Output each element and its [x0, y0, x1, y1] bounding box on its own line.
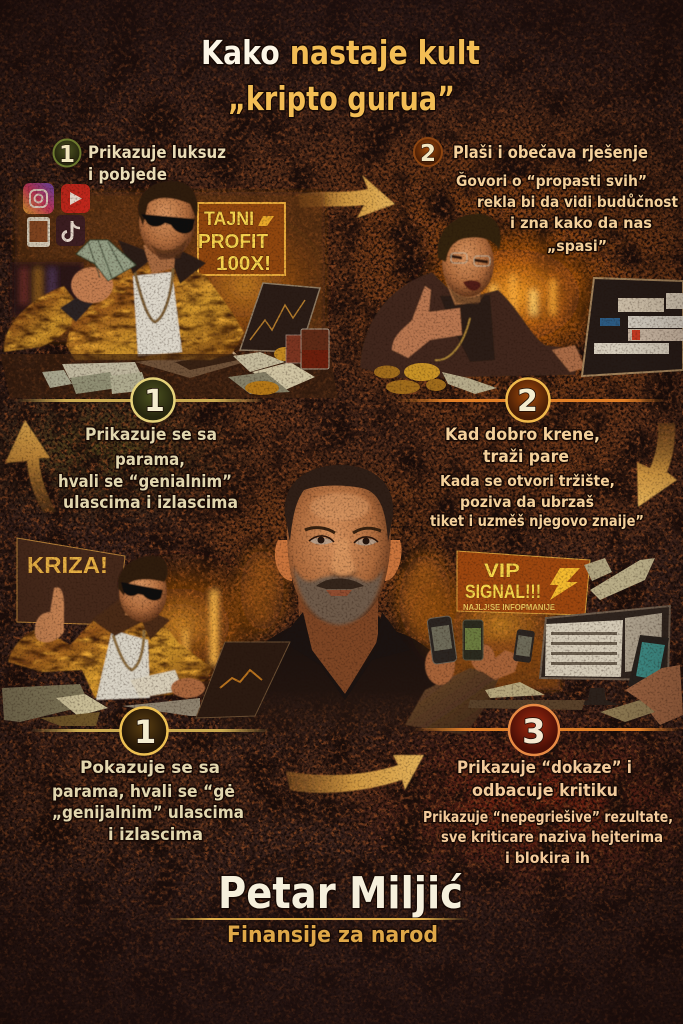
badge: small 1: [54, 140, 80, 168]
arrow: top, panel 1 to panel 2: [298, 175, 395, 218]
badge: small 1: 1: [59, 142, 75, 168]
text: step 2 intro: „spasi”: [547, 237, 607, 255]
man with thumb up: [8, 556, 212, 700]
icon: tiktok: [56, 215, 85, 246]
text: lower left description: [52, 758, 244, 845]
sign: Tajni profit 100x: PROFIT: [198, 231, 268, 253]
text: when it goes well: traži pare: [483, 447, 569, 467]
heading: shows luxury: [88, 143, 226, 185]
panel: step 1 luxury scene: [0, 181, 338, 398]
text: lower left description: Pokazuje se sa: [80, 758, 220, 778]
money stacks: [2, 684, 108, 726]
author name: Petar Miljić: [218, 868, 463, 919]
sign: Tajni profit 100x: [198, 203, 285, 275]
neck: [298, 595, 378, 694]
badge: big 3 red: 3: [522, 712, 546, 752]
panel: step 3 proof scene: [405, 551, 683, 735]
moustache: [316, 578, 364, 589]
phones: [427, 616, 535, 664]
laptop with rust chart: [122, 642, 290, 718]
sign: Kriza: [17, 538, 125, 625]
sign: VIP signal: [457, 551, 655, 615]
glow behind head: [240, 550, 451, 645]
heading: shows proof: odbacuje kritiku: [472, 781, 618, 801]
shirt: [216, 610, 455, 745]
text: when it goes well: tiket i uzměš njegovo znaije”: [430, 512, 644, 530]
collar: [280, 612, 410, 700]
skyline glow: [80, 550, 280, 700]
tagline: Finansije za narod: [227, 923, 438, 948]
icon: phone: [27, 217, 50, 247]
text: step 2 intro: [456, 171, 678, 255]
orange chart glow: [410, 220, 620, 370]
text: step 1 description: parama,: [115, 450, 185, 470]
portrait: Petar Miljić: [216, 465, 455, 745]
badge: small 2: [414, 138, 442, 167]
text: step 1 description: ulascima i izlascima: [63, 493, 238, 513]
heading: shows proof: Prikazuje “dokaze” i: [457, 758, 632, 778]
text: when it goes well: poziva da ubrzaš: [460, 493, 594, 511]
ears: [275, 540, 292, 581]
man in gold jacket with cash: [4, 181, 244, 360]
badge: big 2 orange: [506, 378, 550, 422]
text: step 2 intro: i zna kako da nas: [510, 214, 652, 232]
cash fan: [76, 240, 136, 281]
text: step 3 description: i blokira ih: [505, 849, 590, 867]
title: „kripto gurua”: [228, 79, 455, 118]
heading: scares and promises: Plaši i obečava rješenje: [453, 143, 648, 163]
badge: big 2 orange: 2: [517, 384, 538, 419]
forehead highlight: [310, 493, 370, 521]
face: [287, 482, 391, 623]
desk: [468, 682, 655, 722]
beard: [293, 565, 384, 625]
text: lower left description: parama, hvali se “gė: [52, 782, 235, 802]
panel: lower-left crisis scene: [2, 538, 280, 726]
text: step 3 description: [423, 808, 673, 867]
title: [201, 33, 480, 118]
panel: step 2 fear scene: [360, 214, 683, 394]
table with money and glass: [0, 329, 338, 398]
coins and cash: [374, 363, 497, 394]
text: step 2 intro: Ğovori o “propasti svih”: [456, 171, 647, 190]
heading: shows proof: [457, 758, 632, 801]
text: step 1 description: Prikazuje se sa: [85, 425, 217, 445]
text: when it goes well: Kada se otvori tržište,: [440, 472, 615, 490]
badge: big 1 dark gold: [120, 708, 168, 754]
eyes: [310, 537, 333, 544]
sign: VIP signal: SIGNAL!!!: [465, 582, 541, 603]
phone in hand: [625, 635, 683, 725]
text: step 1 description: [58, 425, 238, 513]
heading: shows luxury: i pobjede: [88, 165, 167, 185]
badge: big 1 olive: 1: [144, 384, 165, 419]
monitor with warnings: [582, 278, 683, 376]
heading: shows luxury: Prikazuje luksuz: [88, 143, 226, 163]
sign: VIP signal: NAJLJ!SE INFOPMANIJE: [463, 602, 555, 612]
arrow: right, panel 2 to panel 3: [637, 423, 677, 507]
glow: [405, 560, 595, 690]
badge: big 1 dark gold: 1: [134, 713, 156, 751]
badge: big 1 olive: [132, 378, 174, 422]
laptop: [135, 283, 320, 378]
badge: big 3 red: [509, 705, 559, 755]
sign: Kriza: KRIZA!: [27, 552, 108, 578]
title: Kako nastaje kult: [201, 33, 480, 72]
nose: [331, 540, 356, 576]
text: lower left description: i izlascima: [108, 825, 203, 845]
icon: instagram: [23, 183, 54, 214]
text: when it goes well: [430, 425, 644, 530]
arrow: left, lower panel to upper panel: [5, 420, 56, 512]
hair: [285, 465, 393, 542]
man with glasses, pleading: [360, 214, 585, 378]
room backdrop: [12, 192, 335, 365]
text: step 1 description: hvali se “genialnim”: [58, 472, 232, 492]
badge: small 2: 2: [420, 141, 436, 167]
icon: youtube: [61, 184, 90, 213]
text: lower left description: „genijalnim” ulascima: [52, 803, 244, 823]
sign: VIP signal: VIP: [484, 561, 520, 582]
arm and hands: [405, 644, 520, 735]
monitor with stats: [540, 606, 670, 705]
sign: Tajni profit 100x: TAJNI: [204, 209, 254, 230]
sign: Tajni profit 100x: 100X!: [216, 253, 271, 275]
arrow: bottom, center to panel 3: [286, 755, 424, 793]
text: when it goes well: Kad dobro krene,: [445, 425, 600, 445]
